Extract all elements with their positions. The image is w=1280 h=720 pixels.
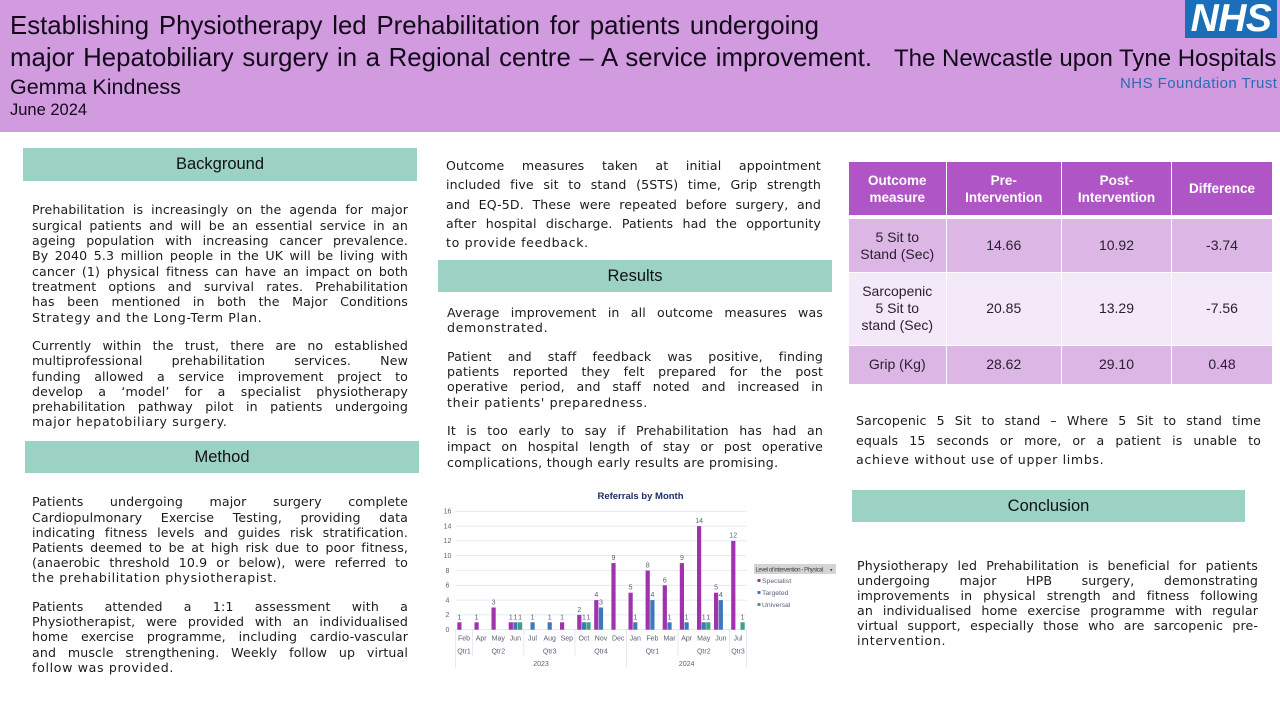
bar chart: referrals by month — [444, 491, 836, 668]
text: sarcopenic definition: achieve without use of upper limbs. — [856, 452, 1104, 467]
table header row: Outcome — [868, 172, 926, 188]
bar value labels: 1 — [509, 614, 513, 622]
bar value labels: 9 — [680, 555, 684, 562]
row: sarcopenic 5 sit to stand: stand (Sec) — [861, 317, 933, 333]
text: background paragraphs: ageing population with increasing cancer prevalence. — [32, 233, 408, 248]
trust name: The Newcastle upon Tyne Hospitals — [894, 45, 1276, 72]
bar value labels: 3 — [599, 600, 603, 606]
row: grip — [849, 346, 1272, 384]
text: results paragraphs: operative period, and staff noted and increased in — [447, 379, 823, 394]
text: conclusion: an individualised home exercise programme with regular — [857, 603, 1258, 618]
bar value labels: 1 — [706, 614, 710, 622]
bar value labels: 2 — [577, 607, 581, 614]
header banner — [0, 0, 1280, 132]
title — [10, 12, 872, 72]
chart legend: Level of intervention - Physical — [756, 568, 824, 574]
month axis labels — [457, 636, 745, 668]
text: outcome measures — [446, 158, 821, 250]
text: results paragraphs: It is too early to say if Prehabilitation has had an — [447, 423, 823, 438]
text: results paragraphs: Patient and staff feedback was positive, finding — [447, 349, 823, 364]
heading: Results — [438, 260, 832, 292]
text: outcome measures: to provide feedback. — [446, 235, 589, 250]
y axis labels: 12 — [444, 538, 451, 545]
month axis labels: 2024 — [679, 661, 695, 668]
text: background paragraphs: surgical patients and will be an essential service in an — [32, 218, 408, 233]
table header row: Pre- — [991, 172, 1017, 188]
month axis labels: Qtr2 — [491, 648, 505, 656]
text: background paragraphs: multiprofessional prehabilitation services. New — [32, 353, 408, 368]
title: Establishing Physiotherapy led Prehabilitation for patients undergoing — [10, 12, 819, 40]
heading: Background — [23, 148, 417, 181]
y axis labels: 10 — [444, 553, 451, 560]
row: sarcopenic 5 sit to stand: 13.29 — [1099, 300, 1134, 316]
bar value labels: 1 — [702, 614, 706, 622]
table header row: measure — [869, 190, 925, 204]
text: conclusion — [857, 558, 1258, 648]
text: conclusion: undergoing major HPB surgery, demonstrating — [857, 573, 1258, 588]
bar value labels: 1 — [457, 614, 461, 622]
outcome measures table — [849, 162, 1272, 384]
chart title: Referrals by Month — [597, 491, 684, 502]
month axis labels: 2023 — [533, 661, 549, 668]
text: background paragraphs: has been mentioned in both the Major Conditions — [32, 294, 408, 309]
month axis labels: Qtr1 — [457, 648, 471, 656]
row: 5 sit to stand: -3.74 — [1206, 237, 1238, 253]
month axis labels: Qtr1 — [646, 648, 659, 656]
text: background paragraphs: By 2040 5.3 million people in the UK will be living with — [32, 248, 408, 263]
text: method paragraphs: Physiotherapist, were provided with an individualised — [32, 614, 408, 629]
y axis labels — [444, 508, 451, 634]
targeted bars — [513, 600, 723, 630]
month axis labels: Oct — [578, 636, 589, 642]
text: method paragraphs — [32, 494, 408, 675]
text: background paragraphs: prehabilitation pathway pilot in patients undergoing — [32, 399, 408, 414]
bar value labels: 5 — [714, 584, 718, 592]
text: conclusion: virtual support, especially those who are sarcopenic pre- — [857, 618, 1258, 633]
specialist bars — [457, 526, 735, 630]
month axis labels: Dec — [612, 636, 625, 642]
text: outcome measures: Outcome measures taken at initial appointment — [446, 158, 821, 173]
table header row — [849, 162, 1272, 215]
bar value labels: 4 — [650, 592, 654, 599]
month axis labels: Qtr2 — [697, 648, 711, 656]
heading: Results: Results — [607, 267, 663, 285]
text: method paragraphs: Patients undergoing major surgery complete — [32, 494, 408, 509]
table header row: Intervention — [1078, 190, 1155, 204]
heading: Conclusion: Conclusion — [1008, 497, 1089, 515]
text: results paragraphs: demonstrated. — [447, 320, 548, 335]
text: conclusion: intervention. — [857, 633, 946, 648]
bar value labels: 5 — [629, 584, 633, 592]
y axis labels: 16 — [444, 508, 451, 516]
table header row: Difference — [1189, 181, 1255, 196]
row: 5 sit to stand — [849, 219, 1272, 272]
trust subtitle: NHS Foundation Trust — [1120, 75, 1277, 92]
chart legend: ▾ — [830, 568, 833, 574]
bar value labels: 1 — [548, 614, 552, 622]
text: method paragraphs: (anaerobic threshold 10.9 or below), were referred to — [32, 555, 408, 570]
month axis labels: Qtr3 — [731, 648, 745, 656]
chart legend: Targeted — [762, 590, 789, 597]
text: results paragraphs — [447, 305, 823, 470]
text: method paragraphs: and muscle strengthening. Weekly follow up virtual — [32, 645, 408, 660]
month axis labels: Jul — [528, 636, 537, 642]
month axis labels: May — [492, 636, 505, 642]
y axis labels: 6 — [446, 582, 450, 590]
text: conclusion: Physiotherapy led Prehabilitation is beneficial for patients — [857, 558, 1258, 573]
bar value labels: 1 — [668, 614, 672, 622]
month axis labels: Qtr3 — [543, 648, 557, 656]
row: grip: 0.48 — [1208, 356, 1236, 372]
text: background paragraphs: Prehabilitation is increasingly on the agenda for major — [32, 202, 408, 217]
heading: Method: Method — [194, 448, 250, 466]
row: sarcopenic 5 sit to stand — [849, 273, 1272, 345]
bar value labels: 1 — [582, 614, 586, 622]
month axis labels: Mar — [663, 636, 676, 642]
bar value labels: 1 — [741, 614, 745, 622]
row: 5 sit to stand: Stand (Sec) — [860, 246, 934, 262]
bar value labels: 1 — [633, 614, 637, 622]
text: results paragraphs: Average improvement in all outcome measures was — [447, 305, 823, 320]
y axis labels: 2 — [446, 612, 450, 619]
text: outcome measures: included five sit to stand (5STS) time, Grip strength — [446, 177, 821, 192]
text: sarcopenic definition: equals 15 seconds or more, or a patient is unable to — [856, 433, 1261, 448]
row: 5 sit to stand: 5 Sit to — [875, 228, 919, 244]
month axis labels: Apr — [681, 636, 693, 642]
chart legend: Specialist — [762, 578, 791, 585]
text: background paragraphs: funding allowed a service improvement project to — [32, 369, 408, 384]
month axis labels: Feb — [646, 636, 659, 642]
bar value labels: 1 — [587, 614, 591, 622]
row: grip: Grip (Kg) — [869, 356, 926, 372]
text: sarcopenic definition: Sarcopenic 5 Sit to stand – Where 5 Sit to stand time — [856, 413, 1261, 428]
row: sarcopenic 5 sit to stand: Sarcopenic — [862, 283, 932, 299]
month axis labels: Sep — [561, 636, 573, 642]
month axis labels: Jul — [734, 636, 743, 642]
text: conclusion: improvements in physical strength and fitness following — [857, 588, 1258, 603]
bar value labels: 6 — [663, 578, 667, 584]
text: background paragraphs: cancer (1) physical fitness can have an impact on both — [32, 264, 408, 279]
chart legend — [754, 564, 836, 609]
heading: Conclusion — [852, 490, 1245, 522]
y axis labels: 14 — [444, 524, 451, 530]
row: sarcopenic 5 sit to stand: 5 Sit to — [875, 300, 919, 316]
month axis labels: Qtr4 — [594, 648, 608, 656]
bar value labels: 1 — [685, 614, 689, 622]
text: results paragraphs: their patients' preparedness. — [447, 395, 648, 410]
table header row: Post- — [1100, 172, 1133, 188]
row: grip: 29.10 — [1099, 356, 1134, 372]
text: method paragraphs: Cardiopulmonary Exercise Testing, providing data — [32, 510, 408, 525]
y axis labels: 8 — [446, 568, 450, 575]
text: method paragraphs: home exercise programme, including cardio-vascular — [32, 629, 408, 644]
bar value labels: 4 — [719, 592, 723, 599]
title: major Hepatobiliary surgery in a Regional centre – A service improvement. — [10, 44, 872, 72]
text: results paragraphs: impact on hospital length of stay or post operative — [447, 439, 823, 454]
month axis labels: Nov — [595, 636, 608, 642]
text: outcome measures: after hospital discharge. Patients had the opportunity — [446, 216, 821, 231]
bar value labels: 9 — [612, 555, 616, 562]
month axis labels: May — [697, 636, 711, 642]
bar value labels: 1 — [560, 614, 564, 622]
text: sarcopenic definition — [856, 413, 1261, 467]
text: background paragraphs: major hepatobiliary surgery. — [32, 414, 228, 429]
chart legend: Universal — [762, 602, 791, 609]
bar value labels: 1 — [518, 614, 522, 622]
author: Gemma Kindness — [10, 75, 181, 99]
month axis labels: Apr — [476, 636, 487, 642]
y axis labels: 0 — [446, 627, 450, 634]
bar value labels: 1 — [475, 614, 479, 622]
text: background paragraphs: develop a ‘model’ for a specialist physiotherapy — [32, 384, 408, 399]
bar value labels: 1 — [531, 614, 535, 622]
text: background paragraphs: Currently within the trust, there are no established — [32, 338, 408, 353]
text: background paragraphs: treatment options and survival rates. Prehabilitation — [32, 279, 408, 294]
text: background paragraphs — [32, 202, 408, 429]
bar value labels: 3 — [492, 600, 496, 606]
bar value labels: 12 — [729, 532, 737, 540]
month axis labels: Jun — [715, 636, 727, 642]
row: 5 sit to stand: 10.92 — [1099, 237, 1134, 253]
table header row: Intervention — [965, 190, 1042, 204]
universal bars — [518, 622, 745, 630]
month axis labels: Jun — [510, 636, 521, 642]
bar value labels: 8 — [646, 562, 650, 570]
y axis labels: 4 — [446, 598, 450, 604]
text: outcome measures: and EQ-5D. These were repeated before surgery, and — [446, 197, 821, 212]
row: grip: 28.62 — [986, 356, 1021, 372]
text: background paragraphs: Strategy and the Long-Term Plan. — [32, 310, 262, 325]
text: method paragraphs: Patients deemed to be at high risk due to poor fitness, — [32, 540, 408, 555]
row: sarcopenic 5 sit to stand: -7.56 — [1206, 300, 1238, 316]
row: sarcopenic 5 sit to stand: 20.85 — [986, 300, 1021, 316]
text: results paragraphs: complications, though early results are promising. — [447, 455, 778, 470]
bar value labels: 4 — [594, 592, 598, 599]
bar value labels: 1 — [513, 614, 517, 622]
text: results paragraphs: patients reported they felt prepared for the post — [447, 364, 823, 379]
text: method paragraphs: indicating fitness levels and guides risk stratification. — [32, 525, 408, 540]
bar value labels — [457, 518, 745, 622]
month axis labels: Aug — [543, 636, 556, 642]
row: 5 sit to stand: 14.66 — [986, 237, 1021, 253]
bar value labels: 14 — [695, 518, 703, 525]
date: June 2024 — [10, 101, 87, 119]
text: method paragraphs: Patients attended a 1:1 assessment with a — [32, 599, 408, 614]
text: method paragraphs: follow was provided. — [32, 660, 174, 675]
month axis labels: Feb — [458, 636, 470, 642]
text: method paragraphs: the prehabilitation physiotherapist. — [32, 570, 277, 585]
heading: Method — [25, 441, 419, 473]
heading: Background: Background — [176, 155, 264, 173]
month axis labels: Jan — [630, 636, 641, 642]
